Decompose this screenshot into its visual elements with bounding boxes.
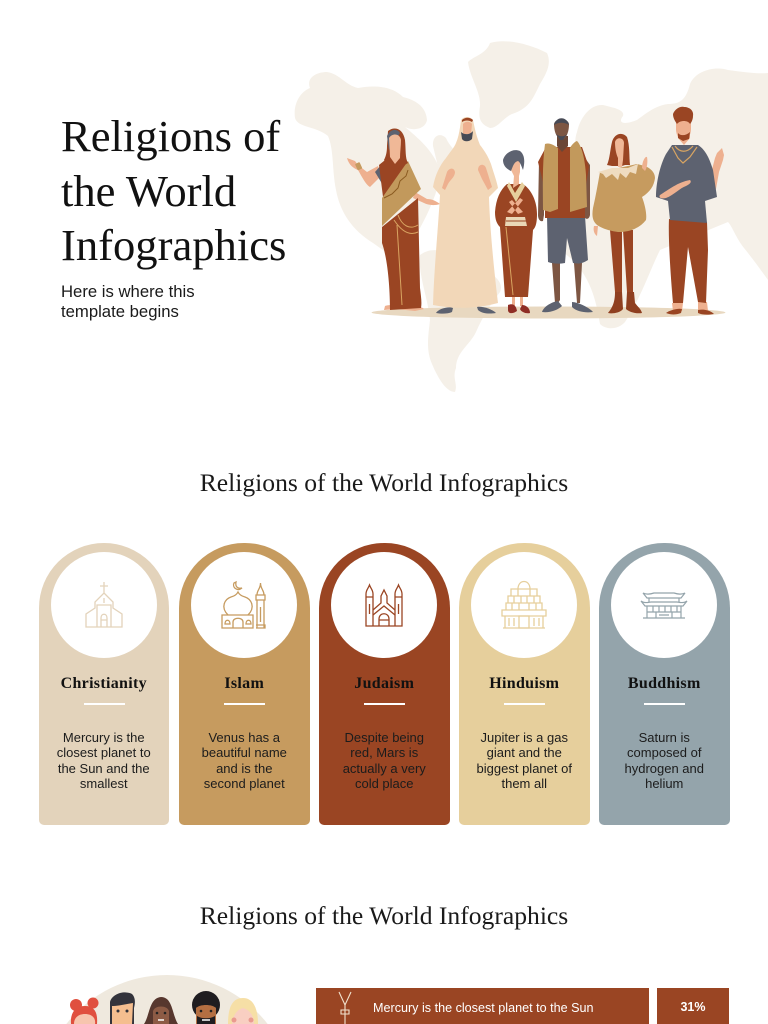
description [624, 730, 704, 791]
title: Religions of [61, 111, 280, 161]
section heading: religions: Religions of the World Infographics [200, 468, 568, 497]
person: man in white robe [433, 117, 498, 314]
title: the World [61, 166, 236, 216]
description: the Sun and the [58, 761, 150, 776]
description: Saturn is [639, 730, 690, 744]
title [61, 111, 286, 270]
person: woman in kimono [495, 150, 537, 313]
section heading: statistics: Religions of the World Infographics [200, 901, 568, 930]
description: giant and the [487, 745, 562, 760]
icon circle: temple [471, 552, 577, 658]
icon circle: church [50, 552, 156, 658]
description: Jupiter is a gas [481, 730, 568, 744]
description: closest planet to [57, 745, 151, 760]
description: and is the [216, 761, 272, 776]
description: cold place [355, 776, 414, 791]
description: second planet [204, 776, 285, 791]
person: woman in tan sweater [592, 134, 655, 313]
icon circle: synagogue [331, 552, 437, 658]
subtitle: template begins [61, 302, 179, 321]
name: Islam [224, 674, 264, 692]
illustration: group of faces [66, 975, 268, 1024]
face: man with curly hair and beard [192, 991, 220, 1024]
face: red-haired girl [70, 998, 98, 1024]
row text: Mercury is the closest planet to the Sun [373, 1001, 594, 1015]
panel: Islam [179, 543, 310, 825]
name: Hinduism [489, 674, 559, 692]
bar: Mercury percentage: 31% [680, 1000, 706, 1014]
description: red, Mars is [350, 745, 418, 760]
description: biggest planet of [477, 761, 572, 776]
panel: Hinduism [459, 543, 590, 825]
description: Mercury is the [63, 730, 145, 744]
panel: Judaism [319, 543, 450, 825]
subtitle [61, 282, 195, 321]
icon circle: mosque [191, 552, 297, 658]
description: them all [501, 776, 547, 791]
description [57, 730, 151, 791]
description [202, 730, 287, 791]
face: woman with long hair [144, 997, 178, 1024]
panel: Buddhism [599, 543, 730, 825]
person: man in slate shirt [656, 107, 724, 315]
illustration: world map with people [294, 41, 768, 392]
bar: Mercury percentage [657, 988, 729, 1024]
face: blonde woman [228, 998, 258, 1024]
description: Venus has a [208, 730, 280, 744]
description [477, 730, 572, 791]
panel: Christianity [38, 543, 169, 825]
icon: rosary [338, 992, 352, 1024]
description: composed of [627, 745, 701, 760]
description: actually a very [343, 761, 426, 776]
description: Despite being [344, 730, 424, 744]
bar: Mercury row [316, 988, 649, 1024]
world map background [295, 41, 768, 392]
icon circle: pagoda [611, 552, 717, 658]
backdrop circle [66, 975, 268, 1024]
person: woman in saree [347, 128, 440, 311]
name: Judaism [354, 674, 414, 692]
description: beautiful name [202, 745, 287, 760]
name: Buddhism [628, 674, 701, 692]
description: smallest [80, 776, 128, 791]
description: helium [645, 776, 683, 791]
ground shadow [372, 306, 726, 318]
title: Infographics [61, 220, 286, 270]
face: man with dark hair [110, 992, 135, 1024]
description [343, 730, 426, 791]
person: man in tan vest [538, 118, 593, 312]
subtitle: Here is where this [61, 282, 195, 301]
description: hydrogen and [624, 761, 704, 776]
name: Christianity [61, 674, 147, 692]
